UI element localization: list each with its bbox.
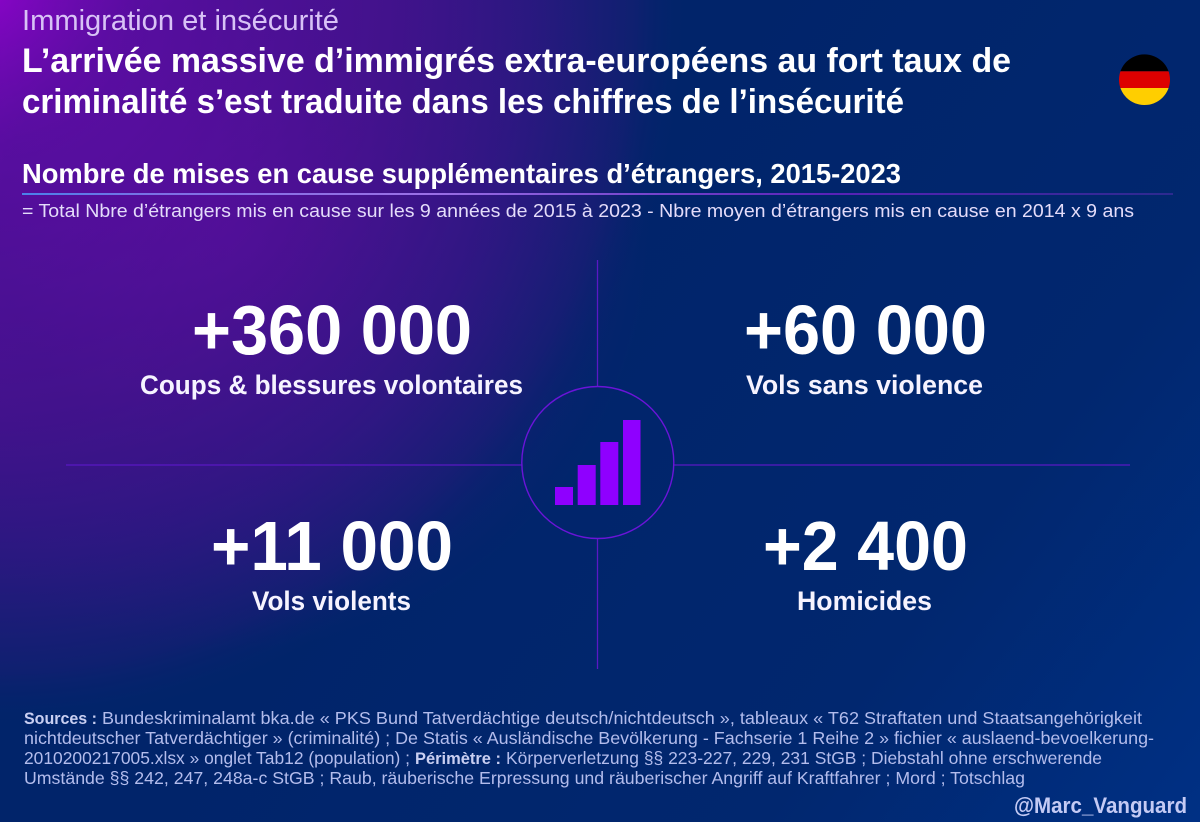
sources text block: Périmètre : [415, 749, 501, 768]
sources text block: Sources : [24, 709, 97, 728]
stat: Homicides: +2 400 [763, 507, 968, 585]
stat: Vols sans violence: Vols sans violence [746, 370, 983, 400]
stat: Homicides [763, 507, 968, 616]
stat: Vols violents: Vols violents [252, 586, 411, 616]
stat: Vols sans violence [744, 291, 987, 400]
kicker: Immigration et insécurité: Immigration et insécurité [22, 5, 339, 37]
stat: Homicides: Homicides [797, 586, 932, 616]
stat: Coups & blessures volontaires: Coups & blessures volontaires [140, 370, 523, 400]
sources text block: Umstände §§ 242, 247, 248a-c StGB ; Raub, räuberische Erpressung und räuberischer Angriff auf Kraftfahrer ; Mord ; Totschlag [24, 768, 1025, 788]
subheading block [22, 158, 1173, 221]
stat: Vols violents [211, 507, 453, 616]
stat: Vols sans violence: +60 000 [744, 291, 987, 369]
handle: @Marc_Vanguard: @Marc_Vanguard [1014, 793, 1187, 818]
stat: Coups & blessures volontaires [140, 291, 523, 400]
sources text block: Bundeskriminalamt bka.de « PKS Bund Tatverdächtige deutsch/nichtdeutsch », tableaux « T62 Straftaten und Staatsangehörigkeit [102, 708, 1142, 728]
title: L’arrivée massive d’immigrés extra-européens au fort taux de [22, 42, 1011, 80]
sources text block: 2010200217005.xlsx » onglet Tab12 (population) ; [24, 748, 410, 768]
icon: German flag [1119, 54, 1170, 106]
sources text block: Körperverletzung §§ 223-227, 229, 231 StGB ; Diebstahl ohne erschwerende [506, 748, 1102, 768]
icon: bar chart in circle [522, 386, 674, 538]
header [22, 5, 1011, 121]
stat: Coups & blessures volontaires: +360 000 [192, 291, 472, 369]
subheading: Nombre de mises en cause supplémentaires d’étrangers, 2015-2023 [22, 158, 901, 189]
sources text block: nichtdeutscher Tatverdächtiger » (criminalité) ; De Statis « Ausländische Bevölkerung - Fachserie 1 Reihe 2 » fichier « auslaend-bevoelkerung- [24, 728, 1154, 748]
title [22, 42, 1011, 121]
formula note: = Total Nbre d’étrangers mis en cause sur les 9 années de 2015 à 2023 - Nbre moyen d’étrangers mis en cause en 2014 x 9 ans [22, 201, 1134, 221]
stat: Vols violents: +11 000 [211, 507, 453, 585]
sources text block [24, 708, 1154, 788]
title: criminalité s’est traduite dans les chiffres de l’insécurité [22, 83, 904, 121]
